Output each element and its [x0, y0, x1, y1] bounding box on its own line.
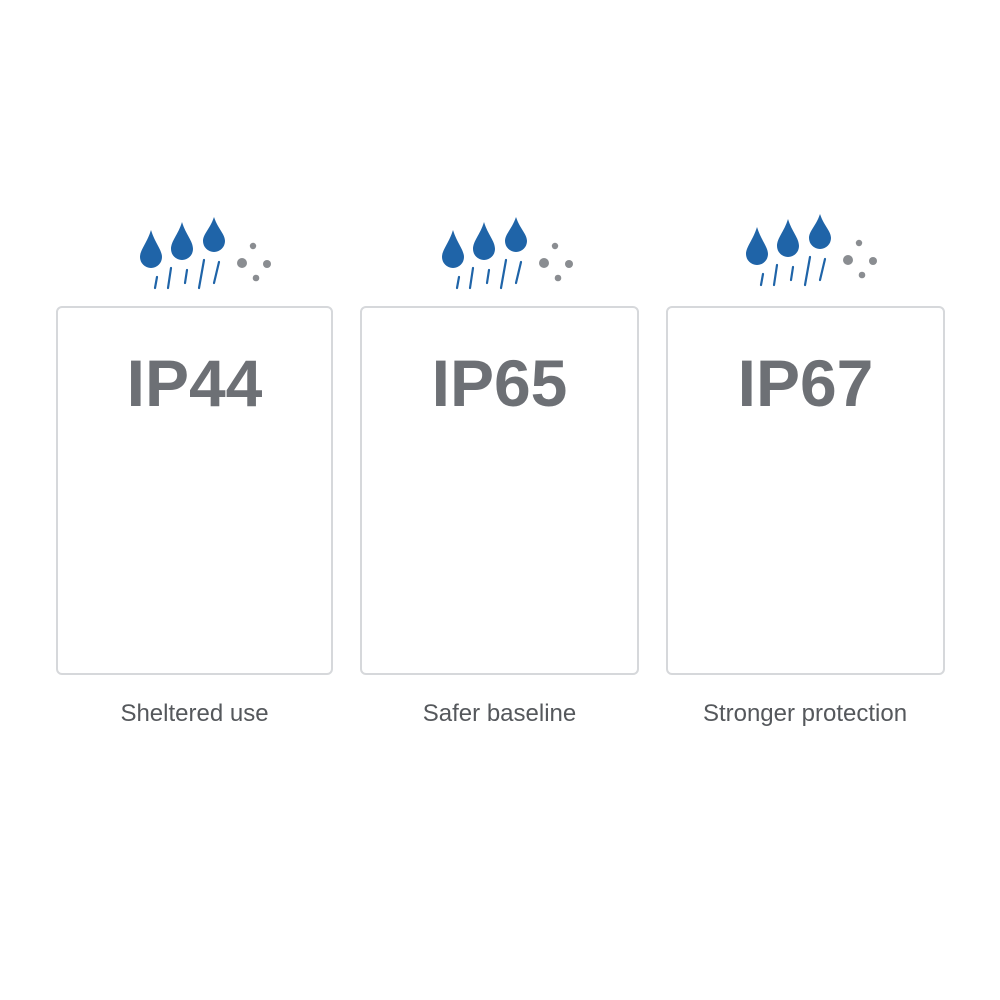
icon: rain and dust IP65 — [442, 217, 573, 290]
icon: rain and dust IP44 — [140, 217, 271, 290]
panel: IP65 — [360, 306, 639, 675]
panel: IP44 — [56, 306, 333, 675]
icon: rain and dust IP67 — [746, 214, 877, 286]
label: Sheltered use: Sheltered use — [120, 700, 269, 727]
panel: IP67 — [666, 306, 945, 675]
heading: IP67: IP67 — [738, 346, 873, 420]
heading: IP65: IP65 — [432, 346, 567, 420]
label: Safer baseline: Safer baseline — [423, 700, 576, 727]
label: Stronger protection: Stronger protection — [703, 700, 907, 727]
heading: IP44: IP44 — [127, 346, 262, 420]
